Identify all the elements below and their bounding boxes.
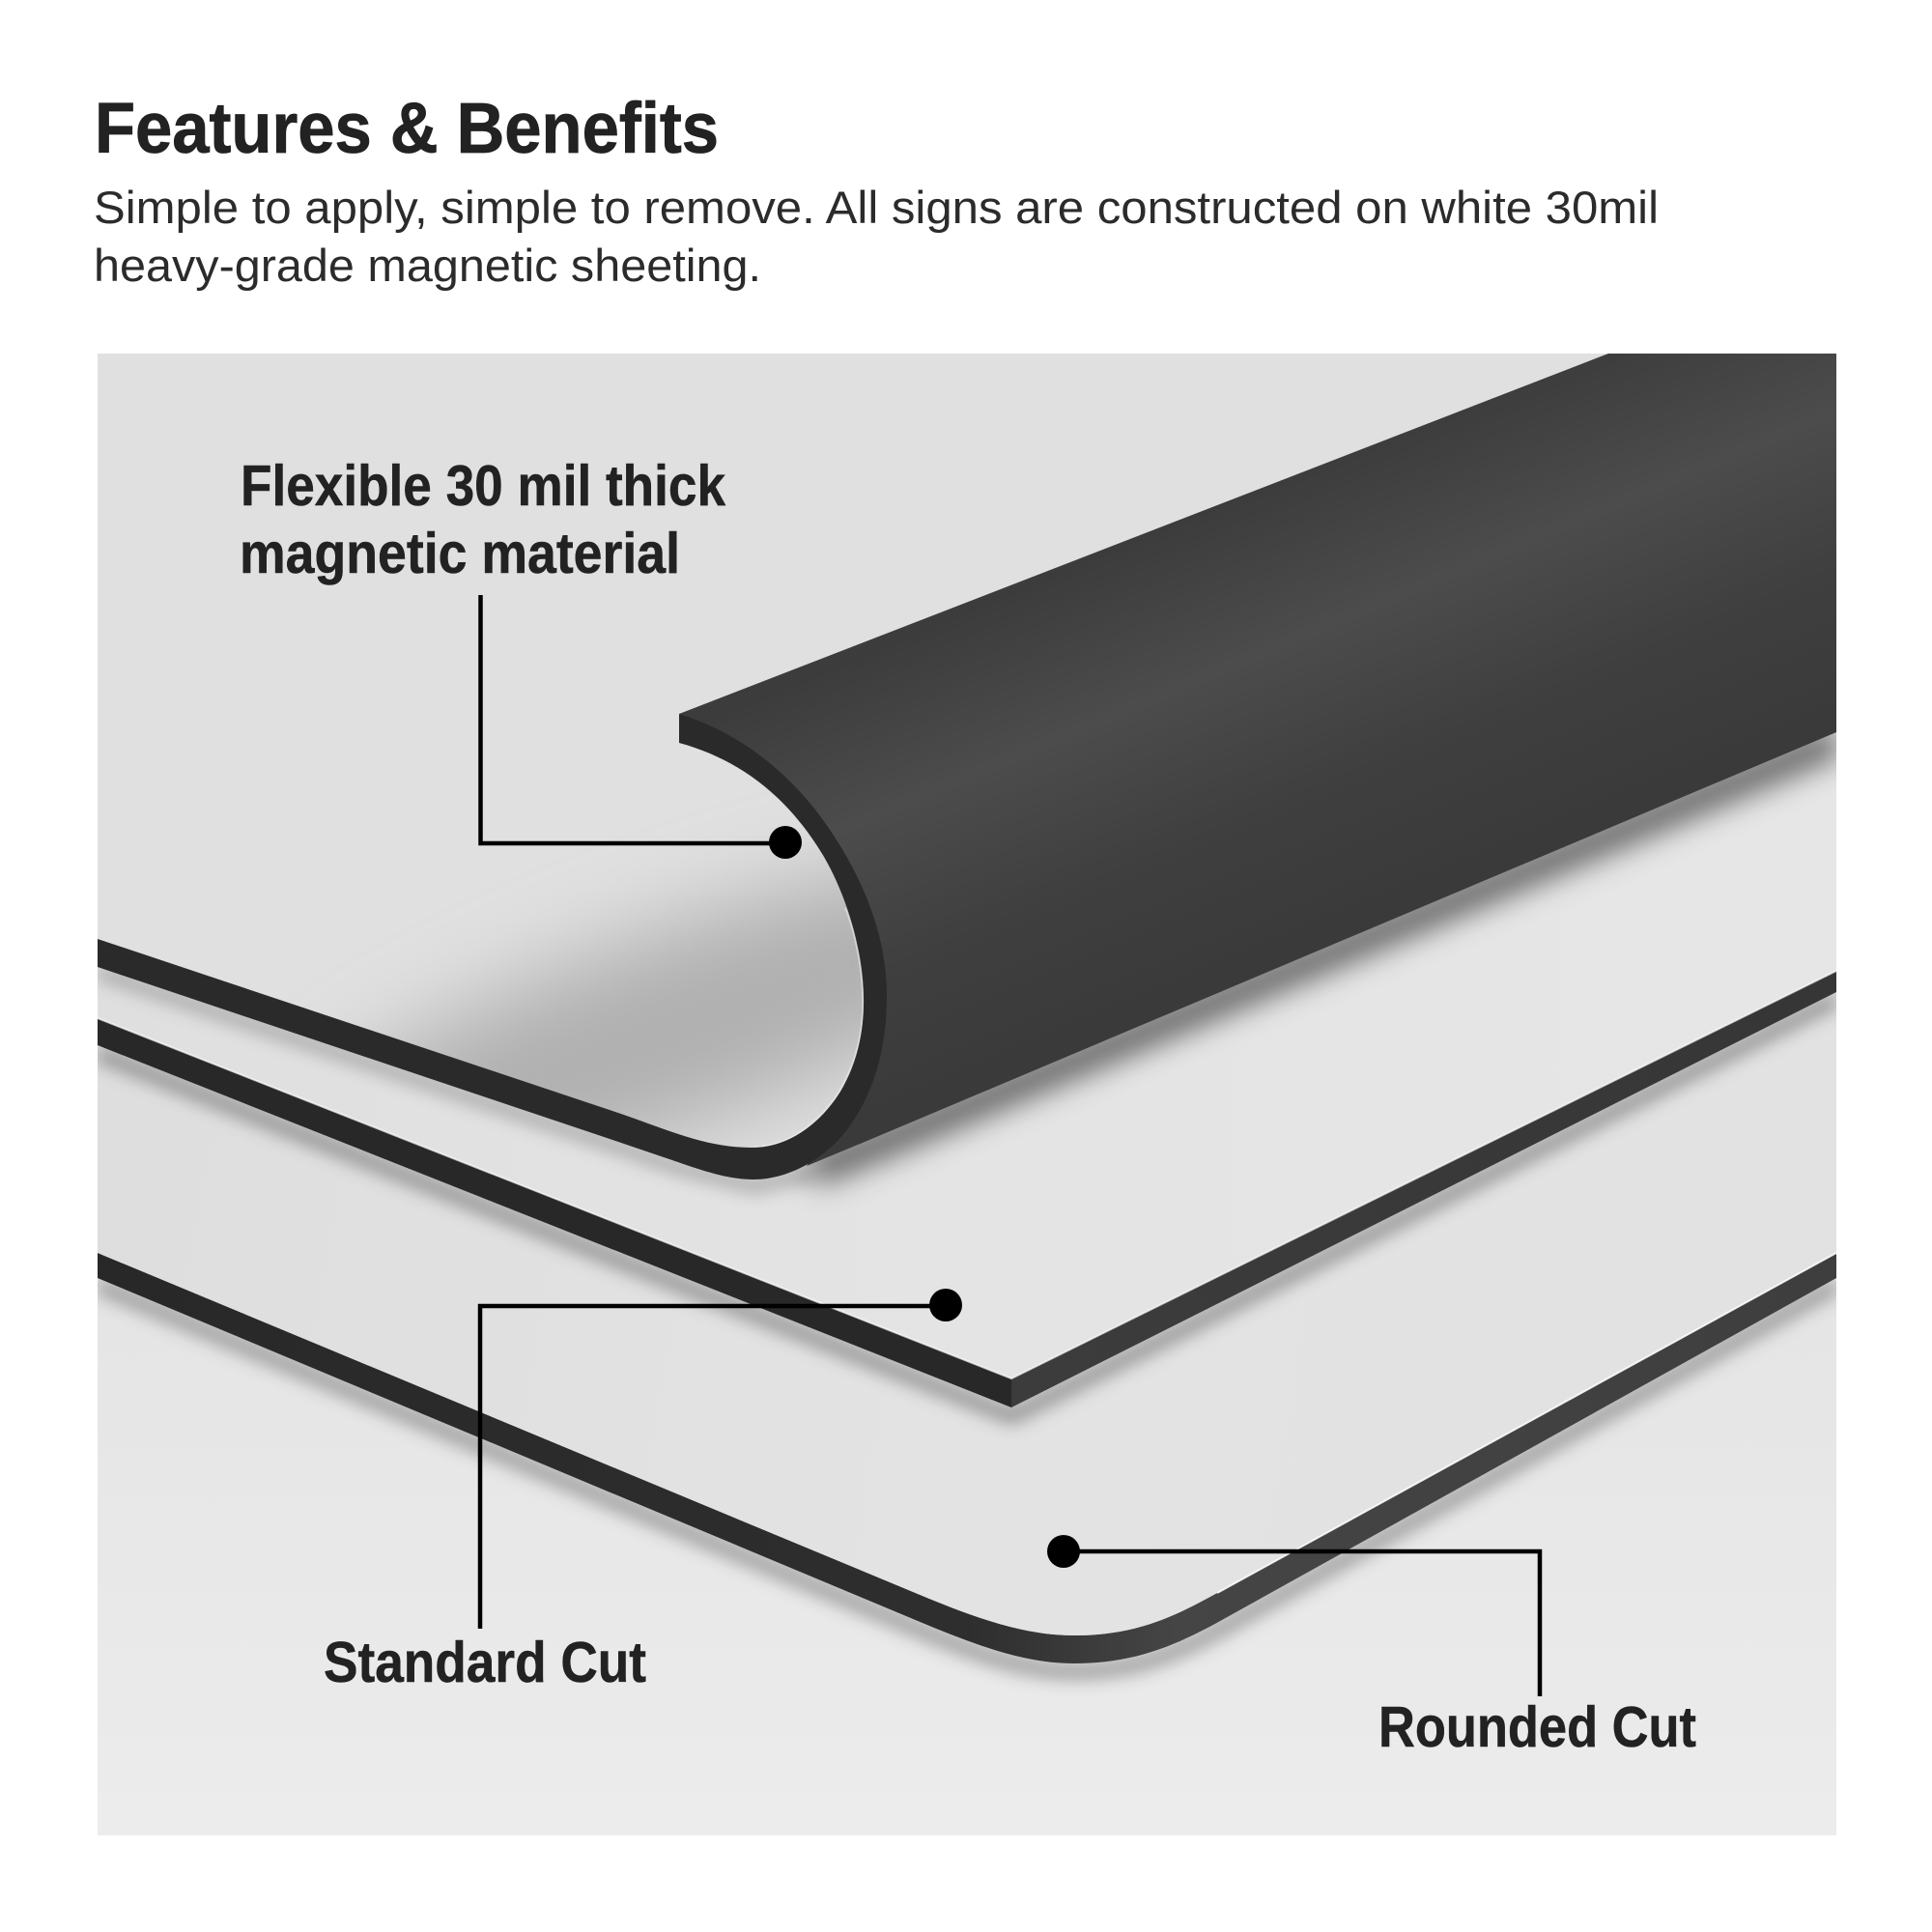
- description text: heavy-grade magnetic sheeting.: [94, 241, 761, 292]
- title: Features & Benefits: [95, 88, 719, 168]
- callout: standard cut: [324, 1289, 962, 1694]
- rounded sheet highlight: [1217, 1253, 1836, 1593]
- shadow: under rounded sheet: [98, 1285, 1836, 1671]
- label: Flexible 30 mil thick: [241, 454, 725, 518]
- standard sheet surface: [98, 354, 1836, 1378]
- rounded sheet edge: [98, 1253, 1836, 1663]
- description text: [94, 183, 1659, 292]
- rounded sheet surface: [98, 1253, 1217, 1635]
- standard cut sheet: [98, 970, 1836, 1407]
- leader line: [480, 1306, 946, 1629]
- shadow: under curled sheet band: [98, 972, 811, 1186]
- label: magnetic material: [240, 522, 680, 585]
- marker dot: [769, 826, 802, 859]
- curled roll dark back: [679, 354, 1836, 1166]
- curled sheet dark edge: [98, 714, 887, 1179]
- shadow: under roll: [811, 740, 1836, 1171]
- floor background: [98, 1278, 1836, 1835]
- curled sheet underside shading: [363, 844, 864, 1148]
- marker dot: [1047, 1535, 1080, 1568]
- standard sheet highlight: [98, 971, 1836, 1378]
- curled sheet inner highlight: [753, 908, 863, 1147]
- leader line: [481, 595, 785, 843]
- standard sheet right edge: [1011, 971, 1836, 1407]
- label: Rounded Cut: [1378, 1695, 1696, 1759]
- leader line: [1064, 1551, 1540, 1696]
- rounded cut sheet: [98, 1252, 1836, 1663]
- label: Standard Cut: [324, 1631, 646, 1694]
- panel: product photo illustration: [98, 354, 1836, 1835]
- curled sheet white surface: [98, 354, 1608, 1148]
- description text: Simple to apply, simple to remove. All signs are constructed on white 30mil: [94, 183, 1659, 234]
- callout: rounded cut: [1047, 1535, 1696, 1759]
- callout: flexible material: [240, 454, 802, 859]
- standard sheet left edge: [98, 1018, 1011, 1407]
- shadow: under standard sheet: [98, 999, 1836, 1416]
- marker dot: [929, 1289, 962, 1321]
